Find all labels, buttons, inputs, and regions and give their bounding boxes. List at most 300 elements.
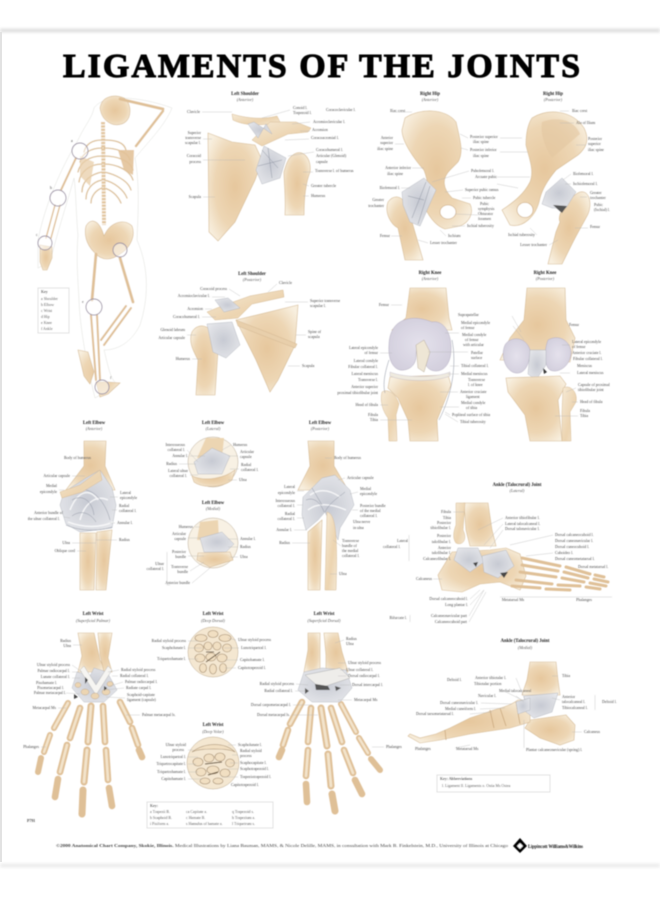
- knee anterior labels: Suprapatellar: [458, 313, 479, 317]
- elbow lateral labels: Radial: [241, 463, 251, 467]
- knee anterior labels: ligament: [466, 395, 481, 399]
- carpal bones and ligaments: [298, 668, 352, 702]
- elbow posterior labels: Ulna: [339, 572, 347, 576]
- ankle medial labels: Dorsal cuneonavicular l.: [440, 701, 478, 705]
- ankle lateral labels: Posterior: [437, 521, 452, 525]
- bent leg: [101, 258, 133, 345]
- knee anterior labels: surface: [471, 356, 483, 360]
- hip anterior labels: trochanter: [368, 204, 385, 208]
- wrist key: b Scaphoid B.: [150, 816, 172, 820]
- knee posterior labels: of femur: [572, 345, 586, 349]
- figure key: a Shoulder: [41, 297, 58, 301]
- elbow lateral labels: collateral l.: [170, 474, 187, 478]
- thumb: [279, 702, 302, 757]
- publisher logo: [513, 838, 583, 853]
- lowered arm: [46, 158, 76, 238]
- knee posterior labels: Femur: [569, 323, 580, 327]
- panel: ankle lateral: (Lateral): [510, 488, 525, 493]
- hip anterior labels: Anterior: [381, 136, 394, 140]
- knee posterior labels: [569, 323, 610, 418]
- shoulder posterior labels: Glenoid labrum: [160, 328, 185, 332]
- panel: full skeleton figure: [36, 96, 172, 398]
- knee anterior labels: with articular: [463, 343, 485, 347]
- capsule: [302, 475, 354, 540]
- scapula labels: Greater tubercle: [311, 184, 336, 188]
- elbow posterior labels: Medial: [360, 487, 371, 491]
- figure key: [38, 288, 69, 333]
- forearm: [192, 470, 235, 486]
- knee anterior labels: Anterior superior: [351, 385, 379, 389]
- elbow medial labels: Anterior bundle: [165, 581, 190, 585]
- capsule highlights: [308, 491, 346, 510]
- superficial dorsal labels: [251, 637, 402, 749]
- ankle lateral labels: Tibia: [443, 516, 451, 520]
- deep dorsal labels: Lunotriquetral l.: [241, 646, 267, 650]
- shoulder posterior labels: Coracoid process: [200, 287, 227, 291]
- elbow lateral labels: Articular: [240, 450, 255, 454]
- scapula labels: Transverse l. of humerus: [315, 169, 354, 173]
- ankle lateral labels: Dorsal talonavicular l.: [505, 527, 540, 531]
- menisci: [390, 372, 450, 380]
- shoulder posterior labels: scapular l.: [310, 304, 326, 308]
- knee anterior labels: Popliteal surface of tibia: [452, 413, 490, 417]
- figure letters: b: [50, 186, 52, 190]
- elbow posterior labels: bundle of: [342, 544, 358, 548]
- knee posterior labels: Meniscus: [577, 364, 592, 368]
- ankle medial labels: Dorsal tarsometatarsal l.: [416, 712, 454, 716]
- knee anterior labels: [337, 303, 490, 424]
- hip posterior labels: Ischial tuberosity: [508, 233, 535, 237]
- elbow anterior labels: epicondyle: [40, 490, 57, 494]
- publisher logo: Lippincott Williams&Wilkins: [528, 844, 583, 850]
- elbow anterior labels: Body of humerus: [64, 456, 92, 460]
- ankle medial labels: Anterior tibiotalar l.: [475, 676, 506, 680]
- scapula labels: Trapezoid l.: [293, 111, 312, 115]
- knee posterior labels: Tibia: [580, 414, 588, 418]
- elbow posterior labels: the medial: [342, 549, 358, 553]
- elbow posterior labels: collateral l.: [278, 504, 295, 508]
- capsule: [402, 178, 436, 226]
- panel: ankle lateral: [383, 483, 612, 624]
- capsule: [542, 178, 576, 208]
- hip posterior labels: Lesser trochanter: [520, 243, 548, 247]
- ankle lateral labels: Anterior: [438, 546, 452, 550]
- knee posterior labels: Lateral meniscus: [577, 371, 604, 375]
- knee anterior labels: Tibial tuberosity: [460, 420, 486, 424]
- knee posterior labels: Anterior cruciate l.: [572, 351, 602, 355]
- elbow medial labels: Humerus: [179, 525, 193, 529]
- joint lines: [445, 702, 520, 740]
- knee posterior labels: Fibular collateral l.: [573, 357, 603, 361]
- knee anterior labels: of tibia: [466, 406, 477, 410]
- ankle medial labels: Medial cuneiform l.: [445, 707, 476, 711]
- wrist key: a Trapezii B.: [150, 810, 170, 814]
- skull: [100, 96, 130, 125]
- shoulder posterior labels: Acromioclavicular l.: [178, 294, 210, 298]
- figure letters: e: [82, 300, 84, 304]
- elbow posterior labels: Interosseous: [276, 499, 295, 503]
- scapula labels: process: [189, 160, 201, 164]
- hip anterior labels: Iliofemoral l.: [379, 186, 400, 190]
- circle bg: [188, 437, 238, 487]
- superficial dorsal labels: Ulnar collateral l.: [346, 668, 373, 672]
- elbow medial labels: Radius: [240, 545, 251, 549]
- superficial dorsal labels: Ulna: [346, 642, 354, 646]
- ankle lateral labels: Dorsal calcaneocuboid l.: [429, 597, 468, 601]
- wrist key: s Hamulus of hamate a.: [186, 822, 223, 826]
- panel: left elbow medial: [146, 501, 256, 585]
- hip posterior labels: Pubic: [594, 203, 603, 207]
- hip anterior labels: Anterior inferior: [385, 166, 412, 170]
- hip posterior labels: trochanter: [590, 196, 606, 200]
- ulna: [325, 512, 337, 590]
- scapula labels: Acromioclavicular l.: [313, 120, 345, 124]
- hip anterior labels: Posterior superior: [470, 135, 498, 139]
- elbow anterior labels: Lateral: [120, 491, 131, 495]
- deep volar labels: process: [172, 748, 184, 752]
- elbow anterior labels: [28, 456, 137, 553]
- panel: right knee anterior: Right Knee: [419, 271, 441, 276]
- posterior capsule shadow: [553, 205, 567, 213]
- scapula labels: Coracoclavicular l.: [326, 108, 356, 112]
- hip anterior labels: iliac spine: [387, 172, 403, 176]
- deep volar labels: Capitotrapezoid l.: [231, 783, 259, 787]
- hip anterior labels: superior: [380, 141, 394, 145]
- humerus: [191, 326, 218, 395]
- elbow medial labels: Ulna: [240, 555, 248, 559]
- elbow medial leader lines: [167, 527, 238, 585]
- wrist palmar labels: Ulna: [63, 644, 71, 648]
- wrist palmar labels: Radius: [60, 639, 71, 643]
- deep volar labels: Capitohamate l.: [161, 777, 186, 781]
- elbow posterior labels: epicondyle: [278, 491, 295, 495]
- elbow lateral leader lines: [179, 445, 239, 480]
- ankle lateral labels: Bifurcate l.: [389, 616, 407, 620]
- ankle medial labels: Medial talocalcaneal: [499, 689, 531, 693]
- pinky: [341, 704, 380, 770]
- deep dorsal labels: Scapholunate l.: [162, 646, 186, 650]
- raised arm: [120, 99, 163, 146]
- knee anterior labels: Patellar: [471, 351, 484, 355]
- knee anterior labels: Lateral epicondyle: [349, 346, 378, 350]
- figure letters: f: [110, 376, 112, 380]
- ankle lateral labels: talofibular l.: [432, 540, 451, 544]
- ankle medial labels: Metatarsal Ms: [456, 747, 479, 751]
- elbow posterior labels: Lateral: [284, 485, 295, 489]
- elbow lateral labels: collateral l.: [168, 448, 185, 452]
- lateral condyle: [545, 338, 571, 371]
- metatarsals and toes: [512, 558, 608, 590]
- elbow lateral labels: Interosseous: [166, 443, 185, 447]
- elbow posterior labels: collateral l.: [278, 517, 295, 521]
- scapula labels: Acromion: [312, 128, 328, 132]
- hip anterior labels: Greater: [372, 198, 385, 202]
- elbow posterior labels: collateral l.: [342, 554, 360, 558]
- deep volar labels: Triquetrohamate l.: [157, 770, 186, 774]
- radius: [78, 633, 106, 672]
- panel: left elbow lateral: (Lateral): [206, 426, 221, 431]
- wrist key: l Triquetrum s.: [232, 822, 255, 826]
- ankle lateral labels: Fibula: [441, 510, 451, 514]
- wrist key: [147, 802, 273, 828]
- elbow lateral labels: capsule: [240, 455, 252, 459]
- panel: left shoulder anterior: (Anterior): [237, 97, 254, 102]
- middle finger: [82, 706, 91, 814]
- capsule: [207, 322, 240, 358]
- elbow medial labels: Posterior: [172, 550, 187, 554]
- panel: left wrist deep volar: Left Wrist: [203, 723, 224, 728]
- index finger: [103, 706, 112, 806]
- panel: left elbow lateral: Left Elbow: [202, 421, 225, 426]
- hip posterior labels: Iliac crest: [572, 109, 588, 113]
- obturator foramen: [517, 202, 533, 218]
- superficial dorsal labels: Dorsal carpometacarpal l.: [251, 703, 291, 707]
- ankle medial labels: Navicular l.: [478, 694, 496, 698]
- carpal shadow lines: [206, 652, 220, 662]
- posterior ligaments: [215, 298, 240, 312]
- ring finger: [55, 708, 80, 797]
- panel: left elbow posterior: (Posterior): [311, 426, 330, 431]
- superficial dorsal labels: Radius: [346, 637, 357, 641]
- ankle medial labels: talocalcaneal l.: [562, 700, 585, 704]
- circle bg: [187, 737, 239, 789]
- panel: left shoulder anterior: Left Shoulder: [231, 92, 259, 97]
- panel: left elbow posterior: Left Elbow: [309, 421, 332, 426]
- knee anterior labels: of femur: [465, 338, 479, 342]
- elbow medial labels: Articular: [172, 532, 187, 536]
- scapula: [236, 305, 298, 392]
- knee anterior labels: Lateral meniscus: [352, 372, 378, 376]
- wrist palmar labels: Radiate carpal l.: [126, 686, 151, 690]
- tibia: [464, 503, 496, 546]
- figure key: e Knee: [41, 321, 52, 325]
- panel: ankle medial: (Medial): [518, 645, 533, 650]
- panel: left elbow anterior: (Anterior): [86, 426, 103, 431]
- wrist palmar labels: [23, 639, 176, 749]
- clavicle: [232, 114, 280, 125]
- figure letters: c: [36, 233, 38, 237]
- obturator foramen: [440, 205, 456, 219]
- scapula labels: transverse: [185, 136, 201, 140]
- ankle medial labels: Deltoid l.: [602, 700, 617, 704]
- rib cage: [78, 140, 133, 203]
- panel: left wrist deep volar: (Deep Volar): [202, 729, 224, 734]
- ulna: [98, 633, 112, 672]
- superficial dorsal leader lines: [292, 640, 384, 747]
- palmar V ligament: [80, 666, 112, 695]
- circle bg: [188, 518, 238, 568]
- hip anterior labels: [368, 109, 499, 245]
- knee anterior labels: Medial meniscus: [461, 372, 488, 376]
- deep dorsal labels: Ulnar styloid process: [238, 638, 272, 642]
- poster top edge shadow: [0, 29, 660, 32]
- hip posterior labels: Ischiofemoral l.: [573, 182, 598, 186]
- elbow posterior labels: Ulna nerve: [353, 520, 370, 524]
- spine of scapula: [236, 320, 297, 348]
- panel: left shoulder anterior: [185, 92, 356, 241]
- panel: left wrist deep dorsal: [152, 612, 272, 677]
- ankle lateral labels: Cuboideo l.: [555, 551, 573, 555]
- medial condyle: [503, 339, 530, 373]
- ilium shadow: [541, 119, 580, 158]
- panel: left shoulder posterior: Left Shoulder: [238, 272, 266, 277]
- hip anterior labels: Pubic: [480, 202, 489, 206]
- elbow anterior labels: Radial: [119, 504, 129, 508]
- joint locator circles: [38, 143, 127, 394]
- fibula: [381, 391, 399, 441]
- panel: left shoulder posterior: (Posterior): [243, 277, 262, 282]
- ankle lateral labels: Metatarsal Ms: [502, 598, 525, 602]
- wrist palmar leader lines: [41, 645, 140, 747]
- elbow medial labels: capsule: [174, 537, 186, 541]
- panel: left wrist superficial dorsal: [251, 612, 402, 811]
- panel: right hip anterior: Right Hip: [420, 92, 440, 97]
- elbow lateral labels: Ulna: [239, 478, 247, 482]
- pelvis: [85, 221, 133, 259]
- femur: [387, 197, 423, 260]
- humerus: [197, 438, 224, 458]
- scapula: [208, 133, 262, 241]
- cruciate ligaments: [528, 350, 546, 380]
- ankle lateral labels: Anterior tibiofibular l.: [505, 516, 540, 520]
- middle finger: [321, 708, 335, 811]
- poster bottom edge shadow: [0, 864, 660, 867]
- ankle medial labels: [415, 674, 617, 752]
- knee anterior labels: l. of knee: [468, 383, 483, 387]
- knee anterior labels: Fibula: [368, 413, 378, 417]
- title: LIGAMENTS OF THE JOINTS: [63, 48, 580, 85]
- elbow posterior labels: Radial: [285, 512, 295, 516]
- elbow posterior labels: Annular l.: [276, 528, 292, 532]
- hip posterior labels: (Ischial) l.: [594, 208, 610, 212]
- elbow posterior labels: of the medial: [360, 509, 381, 513]
- deep volar labels: Scaphotrapezoid l.: [240, 767, 269, 771]
- ankle lateral labels: Lateral: [397, 539, 408, 543]
- elbow posterior labels: Body of humerus: [334, 456, 362, 460]
- deep dorsal labels: Capitotrapezoid l.: [238, 666, 266, 670]
- panel: left wrist deep volar: [156, 723, 271, 789]
- elbow medial labels: Transverse: [171, 565, 188, 569]
- carpal cluster: [194, 630, 232, 674]
- scapula labels: Coracoacromial l.: [311, 136, 339, 140]
- ankle lateral labels: Dorsal calcaneocuboid l.: [555, 533, 594, 537]
- elbow posterior labels: collateral l.: [360, 514, 378, 518]
- elbow anterior labels: Radius: [119, 538, 130, 542]
- thumb: [120, 702, 142, 757]
- knee posterior leader lines: [512, 316, 578, 416]
- hip posterior labels: Iliofemoral l.: [573, 172, 594, 176]
- ankle lateral labels: Dorsal metatarsal l.: [578, 565, 608, 569]
- poster left edge shadow: [0, 32, 2, 862]
- wrist key: h Trapezium a.: [232, 816, 255, 820]
- scapula labels: Superior: [188, 131, 202, 135]
- ankle lateral labels: Lateral talocalcaneal l.: [505, 522, 540, 526]
- epicondyle band: [60, 470, 102, 498]
- panel: left wrist deep dorsal: Left Wrist: [203, 612, 224, 617]
- ankle lateral labels: Dorsal cuneocuboid l.: [555, 545, 589, 549]
- knee anterior labels: Lateral condyle: [354, 359, 378, 363]
- hip anterior labels: iliac spine: [473, 154, 489, 158]
- body outline: [38, 98, 172, 398]
- panel: right knee anterior: [337, 271, 490, 441]
- fibres: [306, 488, 345, 512]
- capsule: [200, 532, 234, 552]
- deep volar labels: Ulnar styloid: [166, 743, 186, 747]
- panel: ankle medial: [408, 639, 617, 752]
- ankle lateral labels: Dorsal cuneonavicular l.: [555, 539, 593, 543]
- panel: right knee posterior: Right Knee: [534, 271, 556, 276]
- hip anterior labels: Lesser trochanter: [430, 241, 458, 245]
- ankle medial labels: Phalanges: [415, 747, 431, 751]
- deep volar labels: Radial styloid: [240, 749, 262, 753]
- shoulder posterior labels: Humerus: [176, 357, 190, 361]
- forearm: [197, 552, 233, 567]
- scapula labels: Conoid l.: [293, 106, 308, 110]
- ankle medial leader lines: [415, 676, 595, 748]
- superficial dorsal labels: Ulnar styloid process: [348, 661, 382, 665]
- panel: right hip anterior: (Anterior): [422, 97, 439, 102]
- ankle lateral labels: Long plantar l.: [445, 603, 468, 607]
- knee anterior labels: Anterior cruciate: [460, 390, 487, 394]
- acromion and clavicle: [207, 290, 284, 320]
- shadow notches: [473, 562, 508, 578]
- deep volar labels: [156, 743, 271, 787]
- elbow lateral labels: [166, 443, 259, 482]
- catalogue number: P791: [27, 819, 35, 823]
- hip posterior labels: Femur: [590, 225, 601, 229]
- footer credit: ©2000 Anatomical Chart Company, Skokie, Illinois. Medical Illustrations by Liana Bauman, MAMS, & Nicole Delille, MAMS, in consultation with Mark B. Finkelstein, M.D., University of Illinois at Chicago: [56, 843, 509, 849]
- coracoid ligaments: [248, 122, 272, 138]
- carpal details: [75, 682, 113, 699]
- wrist key: q Trapezoid s.: [232, 810, 254, 814]
- wrist key: i Pisiform a.: [150, 822, 169, 826]
- panel: ankle medial: Ankle (Talocrural) Joint: [501, 639, 550, 644]
- knee shadow: [543, 368, 547, 374]
- knee anterior labels: Femur: [379, 303, 390, 307]
- wrist palmar labels: Metacarpal Ms: [33, 706, 56, 710]
- calcaneus: [525, 715, 575, 745]
- wrist palmar labels: Phalanges: [23, 745, 39, 749]
- panel: left wrist palmar: Left Wrist: [83, 612, 104, 617]
- wrist palmar labels: Radial styloid process: [121, 668, 156, 672]
- ankle lateral labels: Posterior: [437, 534, 452, 538]
- midfoot ligaments: [516, 698, 530, 714]
- knee posterior labels: tibiofibular joint: [578, 388, 605, 392]
- elbow anterior labels: Ulna: [62, 541, 70, 545]
- wrist palmar labels: Pisometacarpal l.: [37, 686, 64, 690]
- humerus: [197, 520, 219, 540]
- hip anterior labels: Posterior inferior: [470, 148, 497, 152]
- panel: left wrist superficial dorsal: Left Wrist: [314, 612, 335, 617]
- ilium: [502, 112, 587, 226]
- elbow posterior labels: Posterior bundle: [360, 504, 386, 508]
- shoulder leader lines: [202, 110, 314, 197]
- shoulder posterior labels: Articular capsule: [158, 336, 185, 340]
- ankle medial labels: Tibiocalcaneal l.: [562, 706, 588, 710]
- panel: left elbow posterior: [276, 421, 386, 590]
- right scapula: [118, 150, 134, 175]
- panel: left wrist superficial dorsal: (Superficial Dorsal): [307, 618, 341, 623]
- standing leg: [91, 254, 100, 380]
- elbow anterior labels: collateral l.: [119, 509, 137, 513]
- hip anterior labels: Pubic tubercle: [473, 196, 496, 200]
- scapulae: [80, 156, 94, 186]
- elbow medial labels: bundle: [175, 555, 186, 559]
- abbreviation key: l. Ligament ll. Ligaments o. Ostia Ms Ostea: [442, 784, 511, 788]
- elbow anterior leader lines: [59, 458, 118, 551]
- knee anterior labels: of femur: [364, 351, 379, 355]
- superficial dorsal labels: Metacarpal Ms: [354, 698, 378, 702]
